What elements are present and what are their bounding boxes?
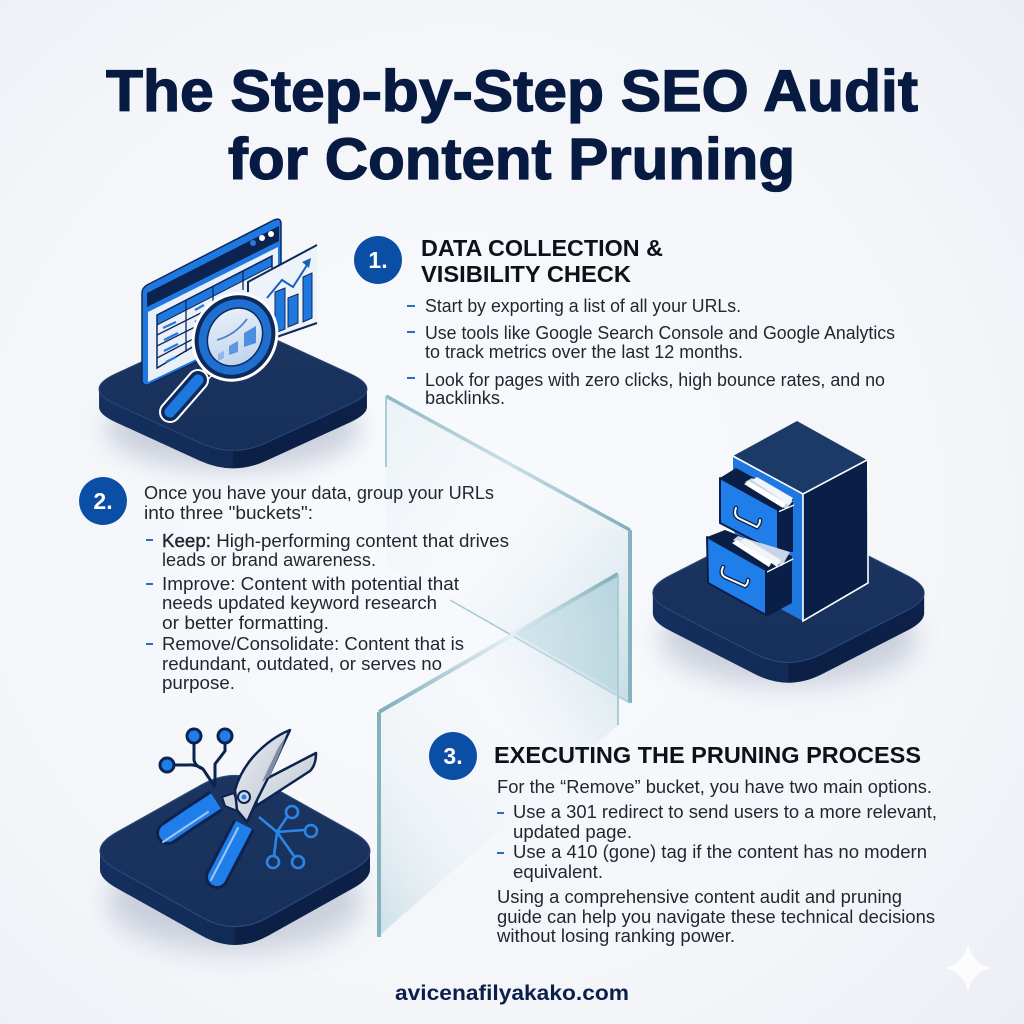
title: for Content Pruning <box>228 127 795 192</box>
title: The Step-by-Step SEO Audit <box>106 59 918 124</box>
heading 1: DATA COLLECTION & <box>421 235 663 261</box>
number badge 2: 2. <box>93 488 113 514</box>
bullets 1: backlinks. <box>425 388 505 408</box>
bullets 2: needs updated keyword research <box>162 593 437 613</box>
intro text 3: For the “Remove” bucket, you have two main options. <box>497 777 932 797</box>
illustration 2: filing cabinet on platform <box>653 421 924 686</box>
closing text 3: Using a comprehensive content audit and pruning <box>497 887 902 907</box>
browser window <box>142 219 281 385</box>
title <box>106 59 918 192</box>
bullets 3 <box>497 802 937 882</box>
heading 3: EXECUTING THE PRUNING PROCESS <box>494 742 921 768</box>
intro text 2 <box>144 483 494 523</box>
bullets 2: Keep: High-performing content that drives <box>162 531 509 551</box>
intro text 2: Once you have your data, group your URLs <box>144 483 494 503</box>
heading 1: VISIBILITY CHECK <box>421 261 631 287</box>
intro text 2: into three "buckets": <box>144 503 313 523</box>
closing text 3: guide can help you navigate these technical decisions <box>497 907 935 927</box>
bullets 1: to track metrics over the last 12 months. <box>425 342 743 362</box>
cabinet body <box>733 421 868 621</box>
navy branch with nodes <box>160 729 232 787</box>
section 3: executing the pruning <box>429 732 937 946</box>
number badge 3 <box>429 732 477 780</box>
bullets 2 <box>146 531 509 693</box>
bullets 2: Remove/Consolidate: Content that is <box>162 634 464 654</box>
number badge 2 <box>79 477 127 525</box>
chart pane <box>248 245 317 350</box>
number badge 1 <box>354 236 402 284</box>
number badge 3: 3. <box>443 743 463 769</box>
glass panel: lower <box>379 574 618 937</box>
bullets 1: Start by exporting a list of all your URLs. <box>425 296 741 316</box>
bullets 3: Use a 301 redirect to send users to a more relevant, <box>513 802 937 822</box>
shears <box>163 730 316 880</box>
heading 1 <box>421 235 663 287</box>
section 1: data collection <box>354 235 895 408</box>
bullets 1 <box>407 296 895 408</box>
blue branch with nodes <box>259 806 317 868</box>
footer website: avicenafilyakako.com <box>395 982 629 1005</box>
closing text 3 <box>496 887 935 946</box>
lower drawer <box>707 530 793 617</box>
bullets 2: or better formatting. <box>162 613 329 633</box>
bullets 3: updated page. <box>513 822 632 842</box>
icon: sparkle <box>944 944 992 992</box>
bullets 1: Look for pages with zero clicks, high bounce rates, and no <box>425 370 885 390</box>
section 2: bucket grouping <box>79 477 509 693</box>
upper drawer <box>720 468 794 553</box>
bullets 2: Improve: Content with potential that <box>162 574 459 594</box>
platform 3 <box>100 775 370 952</box>
bullets 3: Use a 410 (gone) tag if the content has no modern <box>513 842 927 862</box>
platform 2 <box>653 524 924 686</box>
bullets 2: purpose. <box>162 673 235 693</box>
bullets 2: leads or brand awareness. <box>162 550 376 570</box>
bullets 3: equivalent. <box>513 862 603 882</box>
bullets 1: Use tools like Google Search Console and Google Analytics <box>425 323 895 343</box>
illustration 1: data window and magnifier on platform <box>99 219 367 471</box>
bullets 2: redundant, outdated, or serves no <box>162 654 442 674</box>
glass panel: upper <box>386 396 630 703</box>
platform 1 <box>99 328 367 471</box>
illustration 3: pruning shears on platform <box>100 729 370 952</box>
closing text 3: without losing ranking power. <box>496 926 735 946</box>
number badge 1: 1. <box>368 247 388 273</box>
magnifying glass <box>170 275 296 412</box>
